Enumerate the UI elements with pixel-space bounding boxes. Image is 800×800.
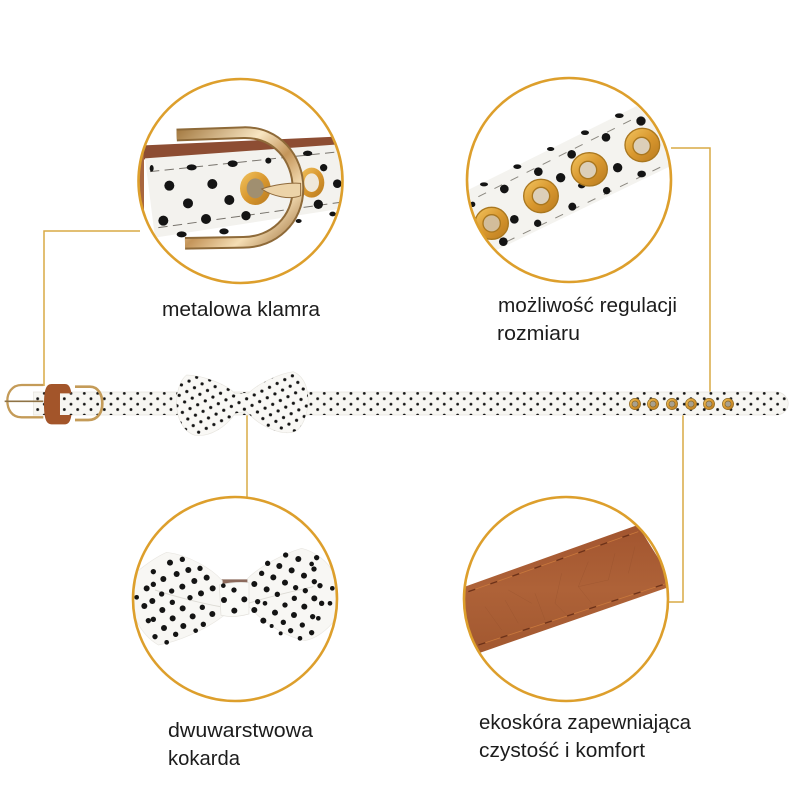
collar strap [33, 392, 788, 415]
grommets [475, 128, 660, 239]
panel: leather detail [458, 497, 675, 701]
buckle frame [177, 133, 298, 243]
collar buckle and keeper [5, 384, 102, 424]
strap [469, 106, 668, 250]
label: bow [168, 720, 314, 770]
bow dots [134, 552, 335, 645]
label: leather: ekoskóra zapewniająca [479, 712, 692, 734]
strap white fabric [145, 144, 343, 238]
label: adjustment holes: możliwość regulacji [498, 295, 677, 317]
connector: leather [668, 412, 683, 602]
bow wings [133, 552, 223, 645]
panel: bow detail [133, 497, 338, 701]
label: leather: czystość i komfort [479, 740, 645, 762]
strap behind bow [221, 579, 248, 584]
panel: adjustment holes detail [463, 78, 687, 282]
collar grommets [629, 398, 734, 410]
bow knot [219, 582, 249, 616]
label: adjustment holes [497, 295, 677, 345]
label: leather [479, 712, 692, 762]
strap brown back [144, 136, 334, 160]
panel: buckle detail [137, 79, 343, 283]
grommets [302, 168, 324, 198]
label: adjustment holes: rozmiaru [497, 323, 580, 345]
connector: bow [246, 415, 248, 497]
connector: adjustment holes [671, 148, 710, 396]
collar full view [5, 372, 788, 436]
leather stitching [468, 532, 665, 645]
leather band [458, 525, 675, 653]
connector: buckle [44, 231, 140, 386]
collar bow [177, 372, 308, 436]
label: bow: dwuwarstwowa [168, 720, 314, 742]
strap dots [470, 113, 646, 246]
label: buckle: metalowa klamra [162, 299, 321, 321]
label: bow: kokarda [168, 748, 241, 770]
strap dots [150, 151, 342, 237]
leather grain [485, 547, 635, 630]
